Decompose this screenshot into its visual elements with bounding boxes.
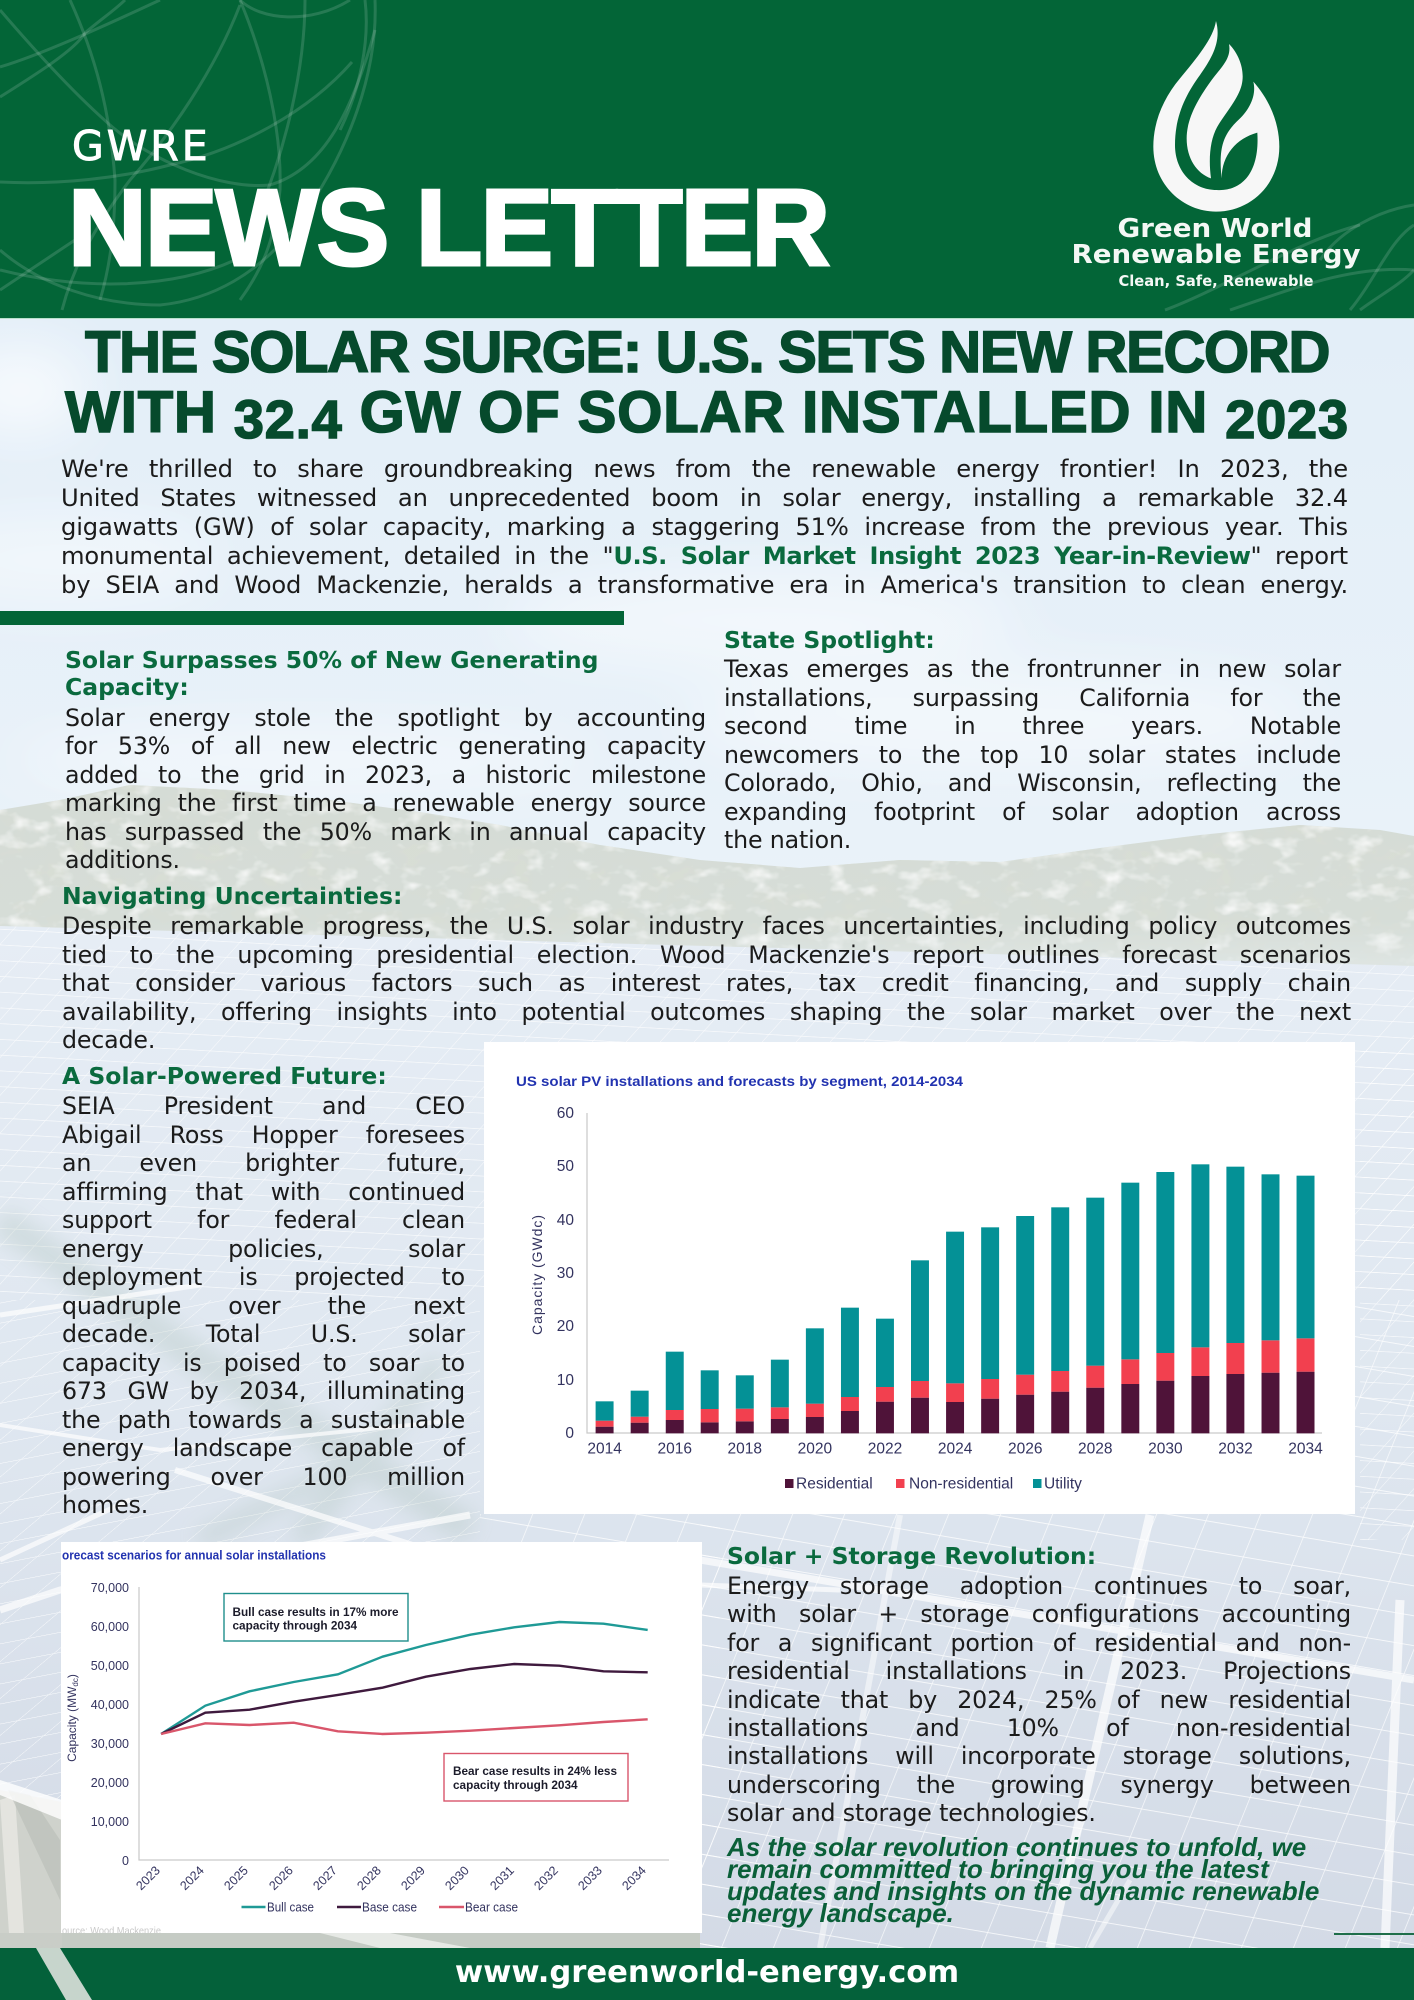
icon: flame and leaf drop	[1153, 21, 1279, 212]
section heading: Solar Surpasses	[65, 646, 598, 701]
callout: bull case	[224, 1594, 408, 1641]
x axis labels: 2022	[868, 1440, 902, 1458]
text: Solar + Storage Revolution: Energy storage adoption continues to soar,	[727, 1572, 1351, 1600]
x axis labels: 2028	[1078, 1440, 1113, 1458]
y axis labels: 10,000	[91, 1815, 129, 1829]
y axis labels	[557, 1105, 574, 1442]
intro paragraph: We're thrilled to share groundbreaking news from the renewable energy frontier! In 2023, the	[61, 455, 1348, 483]
bull case line	[161, 1622, 648, 1734]
x axis labels	[587, 1440, 1323, 1458]
residential segments	[596, 1372, 1315, 1433]
intro paragraph: by SEIA and Wood Mackenzie, heralds a transformative era in America's transition to clean energy.	[61, 571, 1348, 599]
logo: Green World Renewable Energy	[1072, 21, 1361, 290]
y axis labels: 10	[557, 1372, 574, 1389]
closing statement: updates and insights on the dynamic renewable	[727, 1876, 1319, 1906]
section heading: A Solar-Powered Future: A Solar-Powered Future:	[62, 1062, 387, 1090]
text: Navigating Uncertainties: that consider various factors such as interest rates, tax credit financing, and supply chain	[62, 969, 1351, 997]
y axis title: dc	[71, 1678, 80, 1687]
text: Solar Surpasses: marking the first time a renewable energy source	[65, 789, 706, 817]
text: Solar + Storage Revolution: solar and storage technologies.	[727, 1799, 1096, 1827]
text: Solar + Storage Revolution: underscoring the growing synergy between	[727, 1771, 1351, 1799]
x axis labels: 2018	[728, 1440, 762, 1458]
intro paragraph	[61, 455, 1348, 599]
globe line pattern	[0, 0, 1414, 312]
closing statement: As the solar revolution continues to unfold, we	[727, 1832, 1306, 1862]
section heading: Navigating Uncertainties: Navigating Uncertainties:	[62, 882, 402, 910]
text: State Spotlight: Colorado, Ohio, and Wisconsin, reflecting the	[724, 769, 1341, 797]
y axis labels: 40	[557, 1212, 574, 1229]
x axis labels: 2033	[575, 1863, 605, 1893]
x axis labels: 2014	[587, 1440, 622, 1458]
y axis labels: 30,000	[91, 1737, 129, 1751]
x axis labels: 2024	[938, 1440, 973, 1458]
legend: Base case	[362, 1900, 417, 1914]
chart title: US solar PV installations and forecasts by segment, 2014-2034	[516, 1074, 964, 1089]
closing statement: remain committed to bringing you the latest	[727, 1854, 1269, 1884]
small green accent line	[1334, 1933, 1414, 1935]
base case line	[161, 1664, 648, 1734]
intro paragraph: monumental achievement, detailed in the "U.S. Solar Market Insight 2023 Year-in-Review" report	[61, 542, 1348, 570]
text: Solar + Storage Revolution: residential installations in 2023. Projections	[727, 1657, 1351, 1685]
text: A Solar-Powered Future: SEIA President and CEO	[62, 1092, 465, 1120]
logo wordmark: Renewable Energy	[1072, 240, 1361, 270]
callout: bull case: capacity through 2034	[232, 1618, 358, 1632]
text: A Solar-Powered Future: powering over 100 million	[62, 1462, 465, 1490]
text: State Spotlight: installations, surpassing California for the	[724, 684, 1341, 712]
callout: bull case: Bull case results in 17% more	[232, 1605, 399, 1619]
logo wordmark	[1072, 214, 1361, 290]
y axis labels: 40,000	[91, 1698, 129, 1712]
legend	[242, 1900, 518, 1914]
text: A Solar-Powered Future: 673 GW by 2034, illuminating	[62, 1377, 465, 1405]
scenario lines	[161, 1622, 648, 1734]
text: Navigating Uncertainties: Despite remarkable progress, the U.S. solar industry faces uncertainties, including policy outcomes	[62, 912, 1351, 940]
intro paragraph: gigawatts (GW) of solar capacity, marking a staggering 51% increase from the previous year. This	[61, 513, 1348, 541]
x axis labels: 2029	[398, 1863, 428, 1893]
x axis labels: 2034	[1288, 1440, 1323, 1458]
intro paragraph: United States witnessed an unprecedented boom in solar energy, installing a remarkable 32.4	[61, 484, 1348, 512]
green divider bar	[0, 611, 624, 625]
text: Navigating Uncertainties: availability, offering insights into potential outcomes shaping the solar market over the next	[62, 998, 1351, 1026]
y axis labels: 50	[557, 1158, 574, 1175]
text: State Spotlight	[724, 655, 1342, 854]
text: A Solar-Powered Future: Abigail Ross Hopper foresees	[62, 1120, 465, 1148]
y axis labels: 60	[557, 1105, 574, 1122]
text: State Spotlight: expanding footprint of solar adoption across	[724, 798, 1341, 826]
legend	[785, 1476, 1082, 1492]
section heading: Solar + Storage Revolution: Solar + Storage Revolution:	[727, 1542, 1096, 1570]
y axis labels: 0	[122, 1854, 129, 1868]
text: A Solar-Powered Future: energy landscape capable of	[62, 1434, 465, 1462]
text: A Solar-Powered Future: decade. Total U.S. solar	[62, 1320, 465, 1348]
x axis labels: 2016	[657, 1440, 692, 1458]
x axis labels: 2020	[798, 1440, 833, 1458]
headline: THE SOLAR SURGE: U.S. SETS NEW RECORD	[85, 320, 1329, 385]
bear case line	[161, 1719, 648, 1734]
text: Solar Surpasses	[65, 704, 706, 874]
legend: Residential	[796, 1476, 873, 1492]
y axis labels: 70,000	[91, 1581, 129, 1595]
text: Solar Surpasses: Solar energy stole the spotlight by accounting	[65, 704, 706, 732]
text: Navigating Uncertainties: decade.	[62, 1026, 155, 1054]
legend: Non-residential	[909, 1476, 1013, 1492]
x axis labels: 2032	[531, 1863, 561, 1893]
headline: WITH 32.4 GW OF SOLAR INSTALLED IN 2023	[65, 380, 1349, 450]
y axis labels: 50,000	[91, 1659, 129, 1673]
callout: bear case: Bear case results in 24% less	[453, 1764, 617, 1778]
section heading: State Spotlight: State Spotlight:	[724, 626, 935, 654]
callout: bear case: capacity through 2034	[453, 1778, 578, 1792]
text: A Solar-Powered Future	[62, 1092, 466, 1519]
header title: NEWS LETTER: NEWS LETTER	[68, 167, 828, 289]
legend: Utility	[1044, 1476, 1082, 1492]
x axis labels	[133, 1863, 649, 1893]
y axis title: Capacity (MW	[65, 1687, 79, 1762]
bars	[596, 1164, 1315, 1433]
logo wordmark: Green World	[1118, 214, 1312, 244]
text: Solar Surpasses: has surpassed the 50% mark in annual capacity	[65, 818, 706, 846]
x axis labels: 2026	[266, 1863, 296, 1893]
text: A Solar-Powered Future: support for federal clean	[62, 1206, 465, 1234]
text: A Solar-Powered Future: the path towards a sustainable	[62, 1406, 465, 1434]
text: A Solar-Powered Future: homes.	[62, 1491, 148, 1519]
text: Navigating Uncertainties: tied to the upcoming presidential election. Wood Mackenzie's report outlines forecast scenarios	[62, 940, 1351, 968]
website address: www.greenworld-energy.com	[455, 1955, 959, 1990]
x axis labels: 2031	[487, 1863, 517, 1893]
legend: Bear case	[465, 1900, 518, 1914]
logo wordmark: Clean, Safe, Renewable	[1118, 272, 1314, 290]
header band	[0, 0, 1414, 319]
legend: Bull case	[267, 1900, 314, 1914]
text: State Spotlight: second time in three years. Notable	[724, 712, 1341, 740]
section heading: Solar Surpasses: Solar Surpasses 50% of New Generating	[65, 646, 598, 674]
text: A Solar-Powered Future: capacity is poised to soar to	[62, 1348, 465, 1376]
x axis labels: 2024	[177, 1863, 207, 1893]
bar chart: US solar PV installations and forecasts by segment	[484, 1042, 1355, 1514]
x axis labels: 2023	[133, 1863, 163, 1893]
text: A Solar-Powered Future: quadruple over the next	[62, 1292, 465, 1320]
axes	[587, 1113, 1322, 1433]
headline	[64, 320, 1349, 450]
text: State Spotlight: newcomers to the top 10 solar states include	[724, 740, 1341, 768]
text: Solar + Storage Revolution: for a significant portion of residential and non-	[727, 1629, 1351, 1657]
chart title: orecast scenarios for annual solar installations	[62, 1548, 326, 1562]
text: A Solar-Powered Future: an even brighter future,	[62, 1149, 465, 1177]
text: Solar + Storage Revolution: with solar + storage configurations accounting	[727, 1600, 1351, 1628]
text: Solar + Storage Revolution: installations and 10% of non-residential	[727, 1714, 1351, 1742]
text: A Solar-Powered Future: affirming that with continued	[62, 1178, 465, 1206]
text: State Spotlight: the nation.	[724, 826, 851, 854]
text: Solar Surpasses: additions.	[65, 846, 180, 874]
y axis title: Capacity (GWdc)	[529, 1215, 545, 1335]
utility segments	[596, 1164, 1315, 1421]
text: State Spotlight: Texas emerges as the frontrunner in new solar	[724, 655, 1341, 683]
x axis labels: 2028	[354, 1863, 384, 1893]
text: Solar + Storage Revolution: indicate that by 2024, 25% of new residential	[727, 1686, 1351, 1714]
callout: bear case	[444, 1754, 628, 1801]
y axis labels: 20,000	[91, 1776, 129, 1790]
x axis labels: 2025	[221, 1863, 251, 1893]
y axis labels: 30	[557, 1265, 574, 1282]
non-residential segments	[596, 1338, 1315, 1427]
y axis labels: 60,000	[91, 1620, 129, 1634]
header kicker: GWRE: GWRE	[72, 122, 211, 170]
text: A Solar-Powered Future: deployment is projected to	[62, 1263, 465, 1291]
text: Solar + Storage Revolution: installations will incorporate storage solutions,	[727, 1742, 1351, 1770]
text: Solar Surpasses: for 53% of all new electric generating capacity	[65, 732, 706, 760]
closing statement	[726, 1832, 1319, 1928]
y axis title: )	[65, 1674, 79, 1678]
y axis labels	[91, 1581, 129, 1868]
x axis labels: 2026	[1008, 1440, 1042, 1458]
y axis labels: 0	[565, 1425, 574, 1442]
footer band	[0, 1948, 1414, 2000]
x axis labels: 2034	[619, 1863, 649, 1893]
axes	[139, 1587, 669, 1860]
x axis labels: 2032	[1218, 1440, 1253, 1458]
y axis labels: 20	[557, 1318, 574, 1335]
x axis labels: 2030	[1148, 1440, 1183, 1458]
section heading: Solar Surpasses: Capacity:	[65, 673, 189, 701]
line chart: forecast scenarios for annual solar installations	[61, 1542, 702, 1933]
x axis labels: 2027	[310, 1863, 340, 1893]
x axis labels: 2030	[442, 1863, 472, 1893]
text: Navigating Uncertainties	[62, 912, 1351, 1054]
text: Solar + Storage Revolution	[727, 1572, 1351, 1827]
beam crossing footer	[36, 1948, 92, 2000]
text: Solar Surpasses: added to the grid in 2023, a historic milestone	[65, 761, 706, 789]
text: A Solar-Powered Future: energy policies, solar	[62, 1234, 465, 1262]
closing statement: energy landscape.	[727, 1898, 954, 1928]
